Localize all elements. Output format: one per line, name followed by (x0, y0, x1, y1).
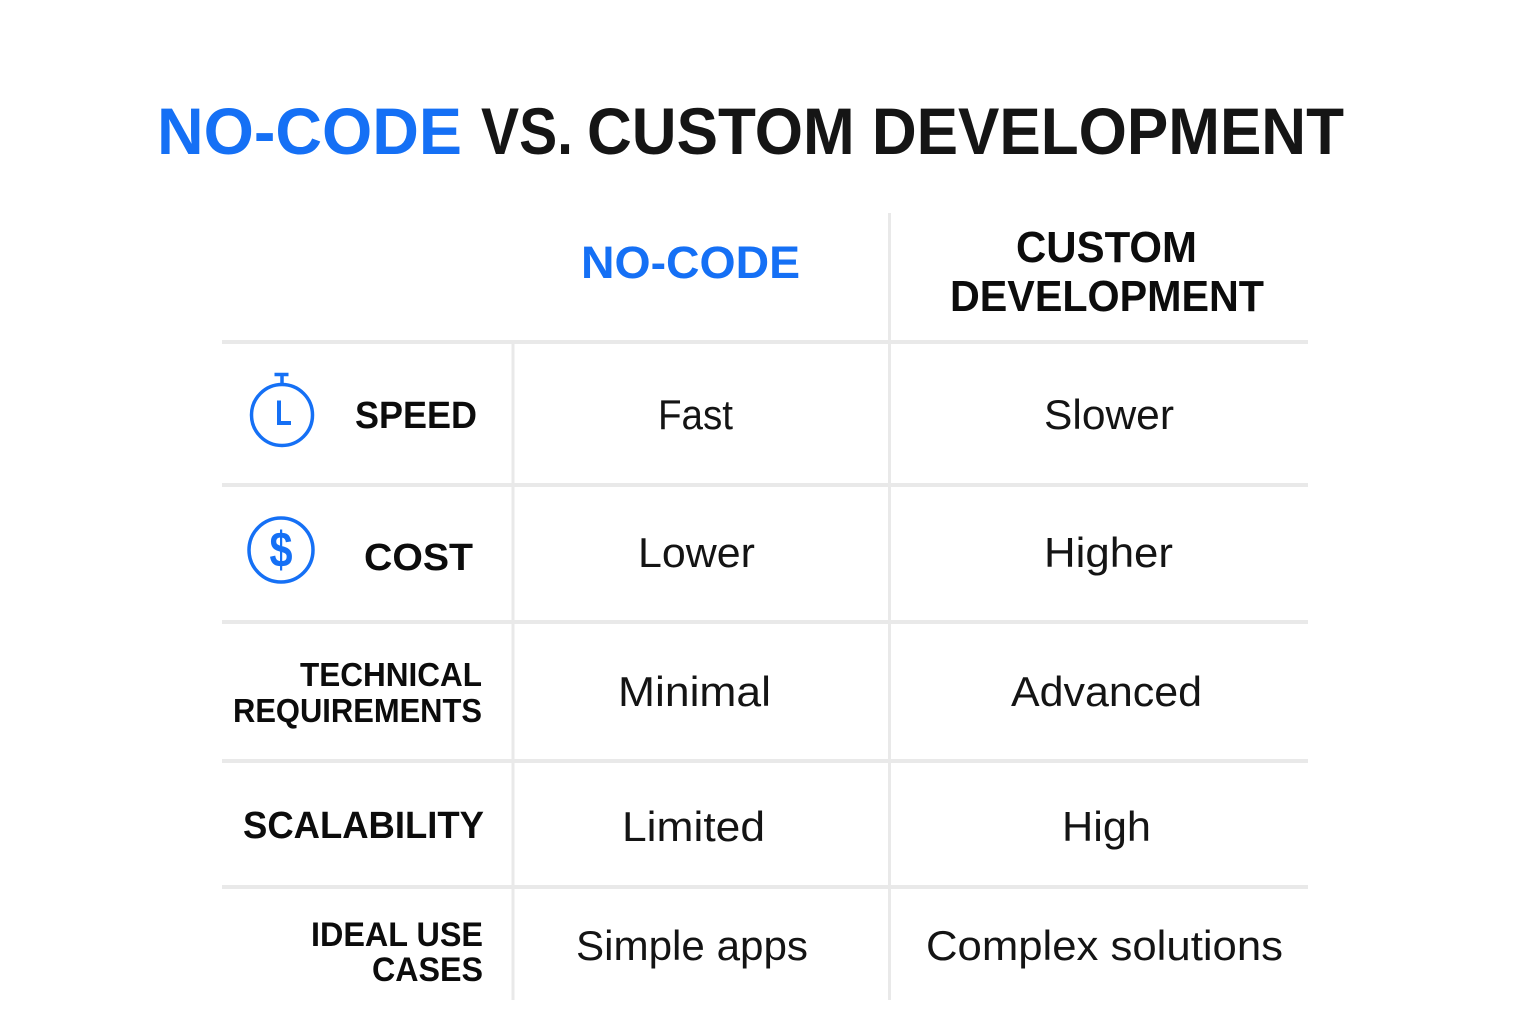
no-code value: fast: Fast (658, 391, 733, 438)
column heading: custom development: DEVELOPMENT (950, 272, 1264, 321)
icon: stopwatch (252, 374, 312, 446)
row: speed (252, 374, 1174, 446)
custom value: higher: Higher (1044, 529, 1173, 576)
label: technical requirements (233, 656, 482, 729)
custom value: slower: Slower (1044, 391, 1174, 438)
label: ideal use cases (311, 916, 483, 989)
row: scalability (243, 803, 1151, 850)
label: ideal use cases: IDEAL USE (311, 916, 483, 954)
label: cost: COST (364, 537, 473, 579)
no-code value: lower: Lower (638, 529, 755, 576)
column heading: custom development (950, 223, 1264, 321)
icon: dollar: $ (270, 522, 293, 578)
title: CUSTOM DEVELOPMENT (587, 94, 1344, 168)
row: ideal use cases (311, 916, 1283, 989)
label: speed: SPEED (355, 395, 477, 437)
custom value: high: High (1062, 803, 1151, 850)
label: technical requirements: TECHNICAL (300, 656, 482, 693)
label: technical requirements: REQUIREMENTS (233, 692, 482, 729)
no-code value: simple apps: Simple apps (576, 922, 808, 969)
title: NO-CODE (157, 94, 462, 168)
row: technical requirements (233, 656, 1202, 729)
custom value: advanced: Advanced (1011, 668, 1202, 715)
no-code value: limited: Limited (622, 803, 765, 850)
row: cost (249, 518, 1173, 582)
title: VS. (481, 94, 573, 168)
title (157, 94, 1344, 168)
label: ideal use cases: CASES (372, 951, 483, 989)
column heading: no-code: NO-CODE (581, 237, 800, 288)
custom value: complex solutions: Complex solutions (926, 922, 1283, 969)
no-code value: minimal: Minimal (618, 668, 771, 715)
label: scalability: SCALABILITY (243, 805, 484, 847)
icon: dollar (249, 518, 313, 582)
column heading: custom development: CUSTOM (1016, 223, 1197, 272)
